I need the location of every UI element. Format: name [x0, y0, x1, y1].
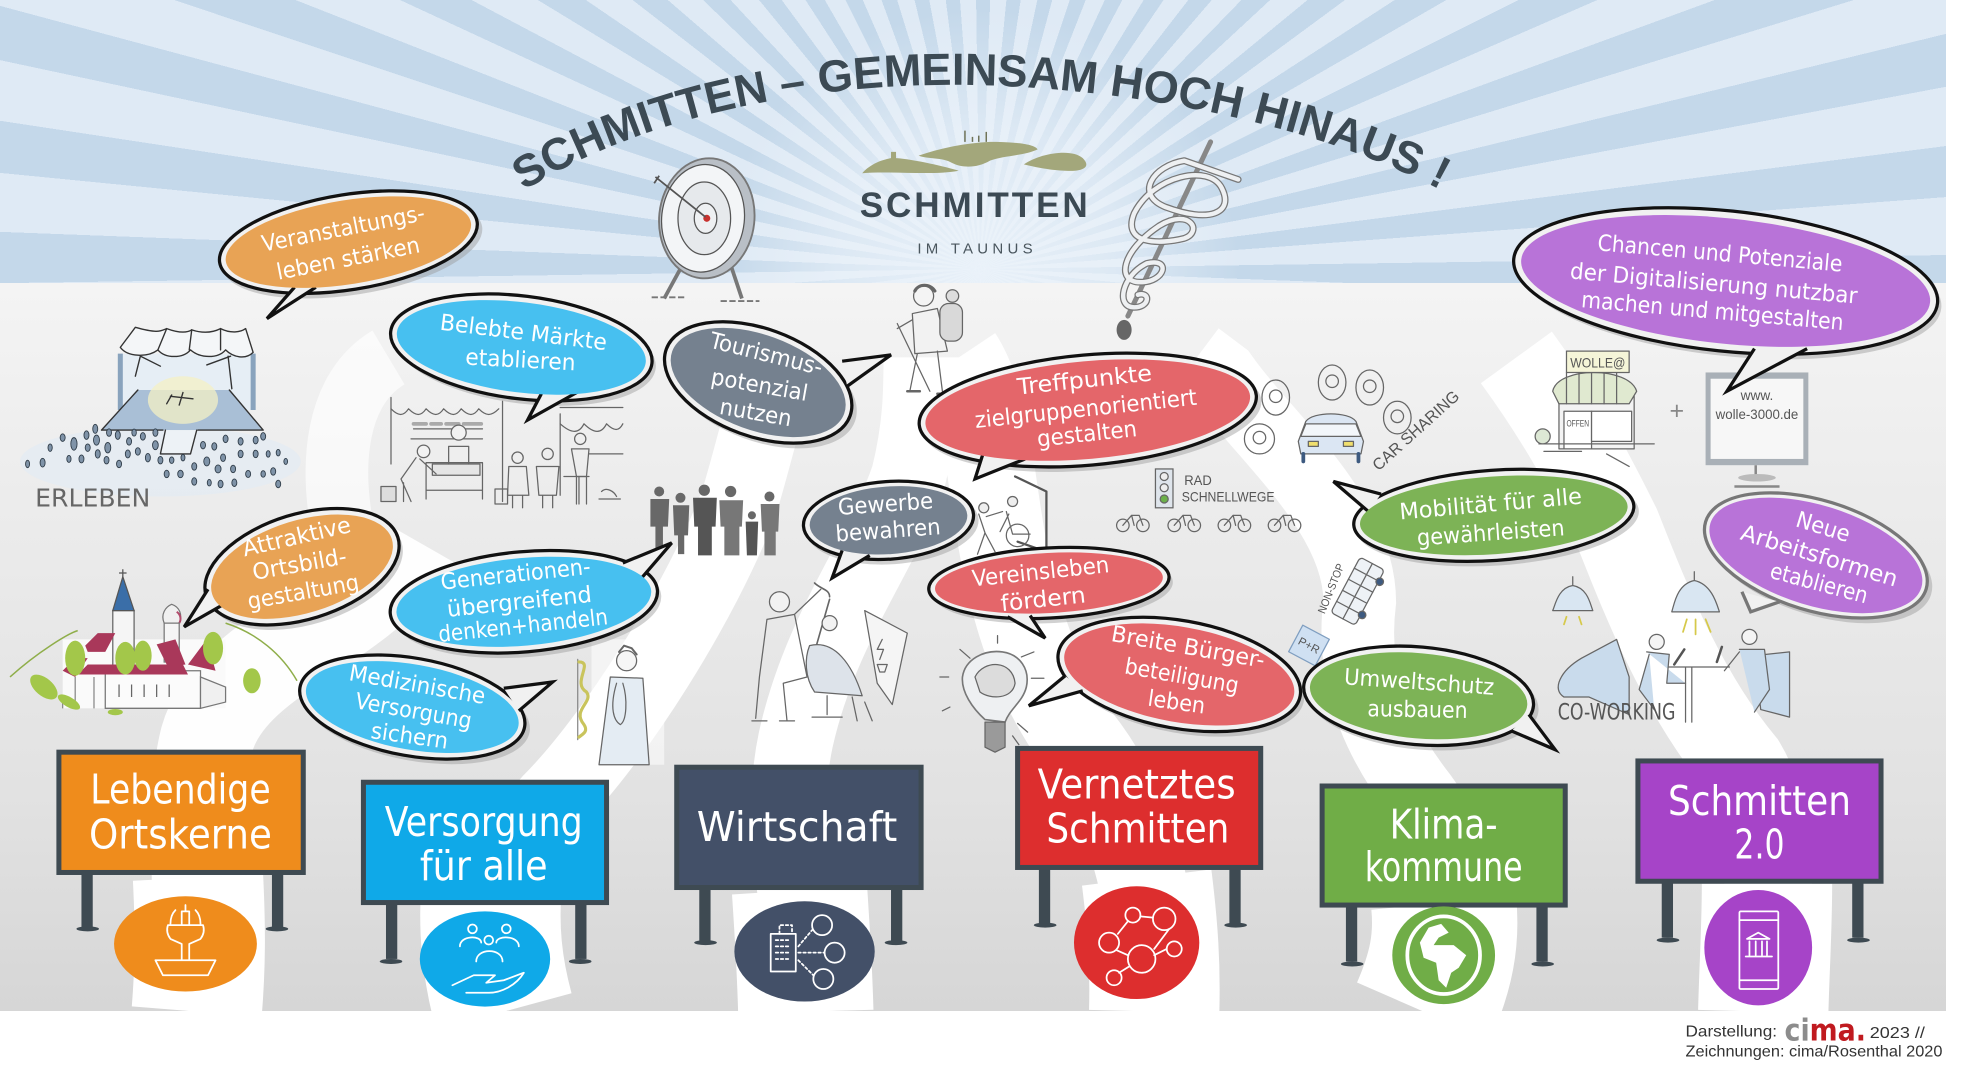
illustration: bus non-stop and P+R: NON-STOP	[1316, 562, 1347, 615]
bubble: Veranstaltungsleben stärken: Veranstaltungs-	[260, 200, 427, 258]
bubble: Medizinische Versorgung sichern	[292, 639, 553, 780]
illustration: shop Wolle	[1535, 351, 1654, 466]
bubble: Tourismuspotenzial nutzen: potenzial	[709, 364, 810, 407]
footer credits: Darstellung:	[1686, 1024, 1777, 1041]
illustration: website screen	[1706, 372, 1808, 486]
bubble: Belebte Märkte etablieren: Belebte Märkte	[439, 310, 608, 356]
bubble: Vereinsleben fördern: fördern	[999, 582, 1087, 617]
bubble: Gewerbe bewahren: bewahren	[835, 514, 941, 548]
illustration: co-working space	[1553, 572, 1790, 722]
label: Co-Working: CO-WORKING	[1558, 700, 1676, 726]
bubble: Neue Arbeitsformen etablieren: Neue	[1793, 507, 1853, 548]
illustration: church and village	[10, 569, 297, 715]
sign: Wirtschaft	[677, 767, 921, 945]
sign: Schmitten 2.0: Schmitten	[1668, 777, 1851, 825]
logo: Schmitten im Taunus	[860, 131, 1088, 257]
icon: target with arrow	[652, 154, 760, 301]
bubble: Treffpunkte zielgruppenorientiert gestalten: Treffpunkte	[1015, 361, 1153, 401]
bubble: Tourismuspotenzial nutzen	[648, 298, 891, 472]
sign: Lebendige Ortskerne: Lebendige	[90, 766, 271, 814]
footer credits	[1686, 1013, 1943, 1061]
bubble: Umweltschutz ausbauen: ausbauen	[1367, 696, 1468, 724]
bubble: Umweltschutz ausbauen	[1299, 637, 1555, 760]
plus sign: +	[1669, 397, 1684, 425]
cima logo: cima.	[1785, 1013, 1866, 1048]
icon: smartphone with town hall	[1704, 890, 1812, 1005]
bubble: Gewerbe bewahren	[801, 476, 981, 578]
bubble: Breite Bürgerbeteiligung leben: beteiligung	[1123, 654, 1241, 699]
bubble: Mobilität für alle gewährleisten	[1333, 461, 1642, 575]
illustration: car sharing	[1244, 365, 1411, 461]
illustration: group of people	[650, 485, 779, 555]
label: ERLEBEN: ERLEBEN	[35, 484, 150, 513]
sign: Klima-kommune	[1322, 786, 1565, 966]
illustration: market stalls	[381, 398, 623, 508]
icon: fountain	[114, 896, 257, 992]
sign: Versorgung für alle: für alle	[420, 842, 548, 890]
sign: Schmitten 2.0: 2.0	[1734, 821, 1785, 869]
bubble: Tourismuspotenzial nutzen: nutzen	[718, 394, 794, 432]
bubble: Mobilität für alle gewährleisten: Mobilität für alle	[1398, 484, 1583, 526]
bubble: Treffpunkte zielgruppenorientiert gestalten: zielgruppenorientiert	[974, 385, 1198, 434]
sign: Vernetztes Schmitten: Vernetztes	[1038, 761, 1236, 809]
bubble: Chancen und Potenziale der Digitalisierung: Chancen und Potenziale	[1597, 230, 1843, 278]
bubble: Gewerbe bewahren: Gewerbe	[837, 488, 934, 521]
icon: network of people	[1074, 886, 1199, 999]
logo: Schmitten im Taunus: IM TAUNUS	[917, 240, 1033, 257]
bubble: Breite Bürgerbeteiligung leben: Breite Bürger-	[1109, 621, 1267, 674]
sign: Klima-kommune: kommune	[1365, 843, 1523, 891]
bubble: Chancen und Potenziale der Digitalisierung	[1506, 189, 1949, 391]
sign: Vernetztes Schmitten: Schmitten	[1046, 804, 1229, 852]
icon: building and people network	[734, 901, 875, 1002]
sign: Versorgung für alle: Versorgung	[385, 798, 583, 846]
bubble: Generationenübergreifend denken+handeln	[386, 540, 672, 668]
bubble: Generationenübergreifend denken+handeln: übergreifend	[446, 582, 593, 623]
illustration: bus non-stop and P+R	[1289, 557, 1389, 666]
footer credits: Zeichnungen: cima/Rosenthal 2020	[1686, 1044, 1943, 1061]
bubble: Belebte Märkte etablieren: etablieren	[465, 345, 576, 376]
bubble: Generationenübergreifend denken+handeln: Generationen-	[439, 554, 592, 596]
bubble: Generationenübergreifend denken+handeln: denken+handeln	[437, 604, 609, 648]
sign: Vernetztes Schmitten	[1018, 748, 1261, 928]
illustration: hairdresser salon	[752, 583, 907, 721]
bubble: Neue Arbeitsformen etablieren: etablieren	[1767, 558, 1871, 609]
sign: Klima-kommune: Klima-	[1390, 801, 1498, 849]
bubble: Attraktive Ortsbildgestaltung	[184, 487, 417, 651]
illustration: shop Wolle: OFFEN	[1566, 418, 1589, 428]
title: SCHMITTEN – GEMEINSAM HOCH HINAUS !	[513, 54, 1450, 188]
icon: spiral screw	[1117, 142, 1238, 340]
bubble: Breite Bürgerbeteiligung leben	[1029, 600, 1313, 754]
bubble: Belebte Märkte etablieren	[384, 280, 662, 420]
bubble: Attraktive Ortsbildgestaltung: Attraktive	[240, 512, 353, 562]
icon: people in hand	[420, 911, 550, 1007]
bubble: Attraktive Ortsbildgestaltung: Ortsbild-	[250, 544, 349, 586]
illustration: light bulb	[940, 636, 1044, 752]
white winding roads	[197, 357, 1768, 1012]
bubble: Medizinische Versorgung sichern: Versorgung	[353, 688, 474, 734]
bubble: Chancen und Potenziale der Digitalisierung: machen und mitgestalten	[1580, 287, 1845, 336]
background: grey ground	[0, 283, 1946, 1011]
illustration: helper with wheelchair and door	[977, 476, 1046, 554]
sign: Versorgung für alle	[363, 782, 607, 964]
bubble: Tourismuspotenzial nutzen: Tourismus-	[706, 328, 825, 381]
bubble: Vereinsleben fördern: Vereinsleben	[971, 552, 1111, 592]
bubble: Neue Arbeitsformen etablieren	[1689, 469, 1947, 647]
illustration: bicycle lanes	[1117, 469, 1301, 532]
bubble: Medizinische Versorgung sichern: sichern	[369, 718, 450, 755]
bubble: Vereinsleben fördern	[927, 542, 1175, 638]
icon: globe	[1392, 906, 1495, 1004]
label: Rad-Schnellwege: RAD	[1184, 473, 1212, 488]
sign: Lebendige Ortskerne	[59, 752, 303, 931]
bubble: Chancen und Potenziale der Digitalisierung: der Digitalisierung nutzbar	[1569, 259, 1859, 310]
background: sky with sun rays	[0, 0, 1946, 283]
bubble: Veranstaltungsleben stärken: leben stärken	[274, 232, 422, 286]
bubble: Treffpunkte zielgruppenorientiert gestalten	[914, 340, 1266, 485]
illustration: bicycle lanes: SCHNELLWEGE	[1182, 490, 1274, 505]
bubble: Attraktive Ortsbildgestaltung: gestaltung	[246, 570, 361, 615]
bubble: Treffpunkte zielgruppenorientiert gestalten: gestalten	[1036, 416, 1138, 453]
label: car sharing: CAR SHARING	[1369, 387, 1463, 474]
illustration: website screen: www.	[1740, 388, 1773, 403]
sign: Schmitten 2.0	[1638, 761, 1881, 943]
illustration: hiker	[897, 285, 962, 394]
bubble: Veranstaltungsleben stärken	[212, 175, 490, 319]
sign: Lebendige Ortskerne: Ortskerne	[89, 811, 272, 859]
illustration: doctor with staff of Asclepius	[578, 639, 664, 765]
logo: Schmitten im Taunus: SCHMITTEN	[860, 186, 1088, 225]
bubble: Umweltschutz ausbauen: Umweltschutz	[1343, 664, 1495, 701]
illustration: website screen: wolle-3000.de	[1715, 407, 1799, 422]
bubble: Breite Bürgerbeteiligung leben: leben	[1146, 686, 1207, 720]
footer credits: 2023 //	[1870, 1025, 1926, 1042]
illustration: shop Wolle: WOLLE@	[1570, 355, 1625, 370]
bubble: Mobilität für alle gewährleisten: gewährleisten	[1416, 515, 1565, 552]
illustration: stage with audience	[20, 327, 301, 513]
sign: Wirtschaft: Wirtschaft	[697, 803, 897, 851]
bubble: Neue Arbeitsformen etablieren: Arbeitsformen	[1737, 520, 1901, 592]
bubble: Medizinische Versorgung sichern: Medizinische	[347, 660, 487, 710]
illustration: bus non-stop and P+R: P+R	[1296, 636, 1321, 657]
